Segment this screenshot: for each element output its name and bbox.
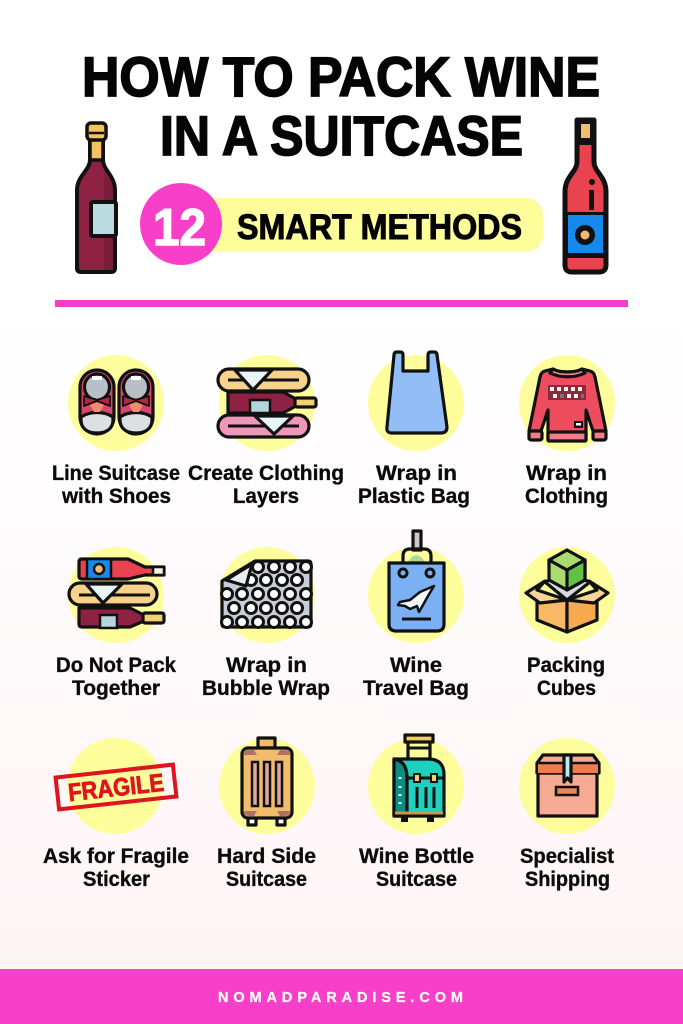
label: Hard Side xyxy=(217,845,316,868)
icon: bubble wrap xyxy=(222,561,312,628)
icon: clothing layers with bottle xyxy=(218,369,316,437)
label xyxy=(43,845,189,891)
subtitle badge xyxy=(140,183,543,265)
label: with Shoes xyxy=(61,485,171,508)
label xyxy=(525,462,608,508)
item: wine bottle suitcase xyxy=(359,735,474,891)
yellow pill xyxy=(170,198,543,252)
label: Packing xyxy=(527,654,605,677)
title: HOW TO PACK WINE xyxy=(82,45,600,108)
label: Wrap in xyxy=(526,462,607,485)
label: Shipping xyxy=(525,868,610,891)
item: wrap in bubble wrap xyxy=(202,547,330,700)
subtitle text: SMART METHODS xyxy=(237,208,522,247)
icon: right wine bottle xyxy=(565,119,606,272)
divider line xyxy=(55,300,628,307)
icon: sweater xyxy=(529,369,606,441)
label: Ask for Fragile xyxy=(43,845,189,868)
title xyxy=(82,45,600,167)
icon: hard suitcase xyxy=(242,738,292,825)
label xyxy=(358,462,470,508)
icon: travel bag xyxy=(389,531,444,631)
item: wrap in plastic bag xyxy=(358,352,470,508)
label: Plastic Bag xyxy=(358,485,470,508)
icon: plastic bag xyxy=(387,352,447,433)
label: Bubble Wrap xyxy=(202,677,330,700)
item: specialist shipping xyxy=(519,738,615,891)
item: wine travel bag xyxy=(363,531,469,700)
title: IN A SUITCASE xyxy=(160,104,523,167)
item: wrap in clothing xyxy=(519,355,615,508)
label: Line Suitcase xyxy=(52,462,180,485)
label xyxy=(363,654,469,700)
label: Travel Bag xyxy=(363,677,469,700)
pink circle with number 12: 12 xyxy=(153,199,206,257)
label: Specialist xyxy=(520,845,614,868)
label: Wine xyxy=(390,654,442,677)
label xyxy=(202,654,330,700)
item: do not pack together xyxy=(56,547,176,700)
label xyxy=(520,845,614,891)
icon: bottles separated by clothing xyxy=(69,559,164,628)
label xyxy=(217,845,316,891)
label: Clothing xyxy=(525,485,608,508)
pink circle with number 12 xyxy=(140,183,222,265)
icon: shipping box xyxy=(537,755,599,816)
label: Wrap in xyxy=(226,654,307,677)
item: ask for fragile sticker xyxy=(43,738,189,891)
label: Sticker xyxy=(83,868,150,891)
label xyxy=(188,462,344,508)
label: Create Clothing xyxy=(188,462,344,485)
item: packing cubes xyxy=(519,547,615,700)
label: Together xyxy=(72,677,160,700)
label: Wrap in xyxy=(376,462,457,485)
footer website text: NOMADPARADISE.COM xyxy=(218,990,463,1006)
label: Wine Bottle xyxy=(359,845,474,868)
item: line suitcase with shoes xyxy=(52,355,180,508)
icon: teal suitcase xyxy=(394,735,444,822)
item: create clothing layers xyxy=(188,355,344,508)
icon: left wine bottle xyxy=(77,123,116,272)
label: Suitcase xyxy=(226,868,307,891)
label xyxy=(359,845,474,891)
icon: shoes xyxy=(80,370,153,434)
label: Do Not Pack xyxy=(56,654,176,677)
label: Suitcase xyxy=(376,868,457,891)
footer band xyxy=(0,969,683,1024)
icon: fragile stamp: FRAGILE xyxy=(67,769,165,807)
label xyxy=(527,654,605,700)
label xyxy=(56,654,176,700)
icon: cube in box xyxy=(526,550,608,632)
label xyxy=(52,462,180,508)
item: hard side suitcase xyxy=(217,738,316,891)
label: Layers xyxy=(233,485,299,508)
label: Cubes xyxy=(537,677,596,700)
